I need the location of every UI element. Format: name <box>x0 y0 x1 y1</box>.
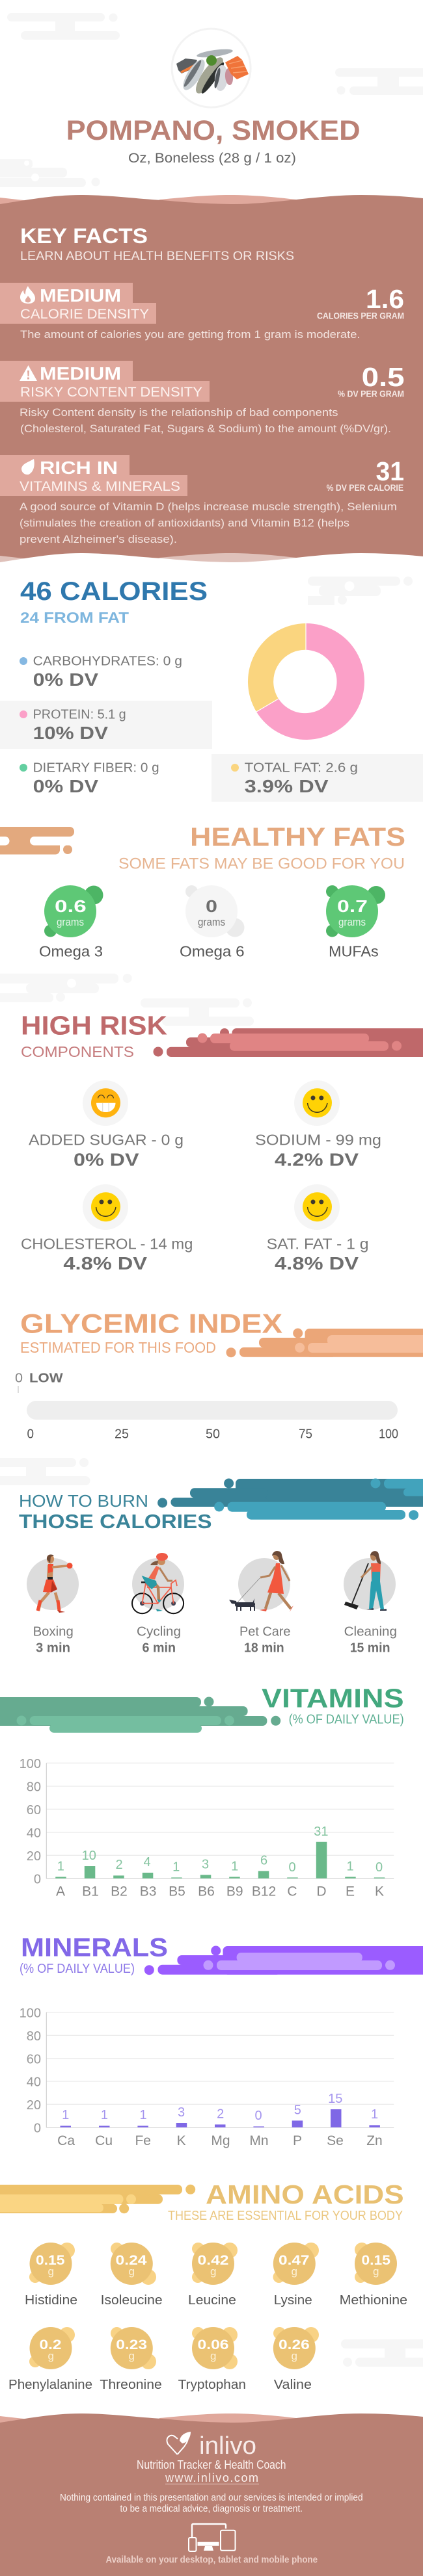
amino: lysine: g <box>292 2265 297 2278</box>
amino: valine: Valine <box>274 2378 312 2392</box>
panel: amino acids <box>0 2179 423 2392</box>
item: added sugar <box>29 1080 184 1169</box>
logo: heart and leaf <box>167 2432 191 2454</box>
heading line 2: THOSE CALORIES <box>19 1510 212 1533</box>
decorative cloud <box>0 1458 90 1485</box>
macro: dietary fiber: DIETARY FIBER: 0 g <box>33 761 159 775</box>
wave bottom edge pale <box>0 553 296 565</box>
fact: calorie density: CALORIE DENSITY <box>20 307 149 322</box>
bar chart: minerals: 0 <box>254 2109 262 2123</box>
disclaimer <box>60 2492 363 2514</box>
amino: methionine: Methionine <box>340 2293 407 2308</box>
bar chart: vitamins: E <box>346 1884 355 1899</box>
bubble: omega 3: Omega 3 <box>39 943 103 960</box>
item: sodium: SODIUM - 99 mg <box>255 1132 381 1149</box>
fact: risky content density: 0.5 <box>362 362 405 392</box>
icon: cyclist <box>132 1553 184 1613</box>
fact: calorie density: CALORIES PER GRAM <box>317 311 404 321</box>
amino: valine: g <box>292 2350 297 2362</box>
logo wordmark: inlivo <box>199 2432 256 2460</box>
fact: risky content density: MEDIUM <box>40 363 121 384</box>
amino: lysine: Lysine <box>274 2293 312 2308</box>
amino: threonine: g <box>129 2350 135 2362</box>
amino: threonine <box>100 2327 162 2392</box>
bar chart: vitamins: 0 <box>34 1872 41 1886</box>
bar chart: minerals: P <box>293 2133 302 2148</box>
bubble: omega 6 <box>180 885 245 960</box>
amino: leucine: 0.42 <box>198 2253 229 2268</box>
bar chart: vitamins: 40 <box>27 1827 41 1841</box>
panel: healthy fats <box>0 823 405 960</box>
heading: MINERALS <box>21 1933 168 1962</box>
activity: boxing <box>27 1554 79 1656</box>
amino: leucine: g <box>210 2265 216 2278</box>
macro: protein: PROTEIN: 5.1 g <box>33 708 126 722</box>
bar chart: minerals: 60 <box>27 2052 41 2066</box>
fact: calorie density: 1.6 <box>366 284 404 314</box>
activity: cleaning: 15 min <box>350 1641 390 1656</box>
heading: HEALTHY FATS <box>190 823 405 852</box>
bar chart: minerals: K <box>177 2133 186 2148</box>
bar chart: vitamins: D <box>316 1884 327 1899</box>
amino: threonine: 0.23 <box>116 2337 147 2352</box>
amino: tryptophan <box>178 2327 246 2392</box>
bar chart: minerals: Cu <box>95 2133 113 2148</box>
bar chart: vitamins: 100 <box>20 1757 41 1771</box>
panel: high risk components <box>0 974 423 1273</box>
bar chart: vitamins: 31 <box>314 1825 329 1839</box>
fact: calorie density: MEDIUM <box>40 285 121 306</box>
panel: vitamins <box>0 1684 404 1899</box>
bar chart: vitamins: 80 <box>27 1780 41 1795</box>
macro: carbohydrates: 0% DV <box>33 670 98 690</box>
amino: methionine: 0.15 <box>362 2253 390 2268</box>
bar chart: vitamins: C <box>287 1884 297 1899</box>
decorative cloud <box>308 577 413 605</box>
bar chart: minerals: Zn <box>366 2133 383 2148</box>
activity: cycling <box>132 1553 184 1656</box>
macro: dietary fiber <box>20 761 159 796</box>
activity: pet care <box>229 1551 293 1656</box>
fact: rich in vitamins and minerals <box>0 455 404 545</box>
fact: rich in vitamins and minerals: (stimulates the creation of antioxidants) and Vitamin B12 (helps <box>20 517 349 529</box>
fact: calorie density <box>0 283 404 341</box>
decorative red bars <box>154 1028 423 1057</box>
icon: woman walking dog <box>229 1551 293 1612</box>
footer background <box>0 2413 423 2576</box>
item: added sugar: 0% DV <box>74 1149 139 1169</box>
bar chart: vitamins: B6 <box>198 1884 215 1899</box>
amino: tryptophan: g <box>210 2350 216 2362</box>
fact: risky content density: % DV PER GRAM <box>338 389 404 399</box>
bar chart: vitamins: B3 <box>140 1884 156 1899</box>
bar chart: minerals: 1 <box>101 2108 108 2122</box>
amino: methionine: g <box>373 2265 379 2278</box>
activity: pet care: Pet Care <box>239 1625 290 1639</box>
bubble: MUFAs: grams <box>338 916 366 928</box>
icon: boxer <box>38 1554 73 1613</box>
macro: total fat <box>212 754 423 802</box>
item: saturated fat: SAT. FAT - 1 g <box>267 1236 369 1253</box>
subheading: (% OF DAILY VALUE) <box>20 1962 135 1976</box>
decorative orange bars <box>226 1329 423 1357</box>
gauge marker <box>18 1386 19 1393</box>
heading: GLYCEMIC INDEX <box>20 1308 282 1339</box>
bar chart: vitamins: 1 <box>172 1860 180 1874</box>
gauge scale: 0 <box>27 1427 34 1442</box>
subheading: THESE ARE ESSENTIAL FOR YOUR BODY <box>168 2209 403 2223</box>
heading: AMINO ACIDS <box>206 2179 404 2209</box>
panel: glycemic index <box>15 1308 423 1442</box>
panel background <box>0 195 423 566</box>
icon: woman sweeping <box>344 1551 387 1611</box>
icon: smiling face <box>91 1192 120 1221</box>
key facts subheading: LEARN ABOUT HEALTH BENEFITS OR RISKS <box>20 249 294 263</box>
icon: leaf <box>21 459 34 475</box>
item: cholesterol: 4.8% DV <box>63 1253 147 1273</box>
bar chart: vitamins: 1 <box>346 1859 354 1873</box>
heading: calories: 46 CALORIES <box>20 577 208 606</box>
bubble: omega 3: grams <box>57 916 84 928</box>
bar chart: vitamins: 2 <box>115 1858 123 1872</box>
bar chart: minerals: 100 <box>20 2006 41 2020</box>
bubble: omega 3: 0.6 <box>55 896 87 916</box>
amino: leucine: Leucine <box>188 2293 236 2308</box>
bubble: omega 6: Omega 6 <box>180 943 245 960</box>
fact: rich in vitamins and minerals: RICH IN <box>40 458 118 478</box>
amino: isoleucine: Isoleucine <box>101 2293 163 2308</box>
decorative cloud centre <box>141 998 254 1026</box>
item: sodium <box>255 1080 381 1169</box>
macro: protein: 10% DV <box>33 723 108 743</box>
fact: risky content density: Risky Content density is the relationship of bad components <box>20 406 338 419</box>
macro: total fat: TOTAL FAT: 2.6 g <box>245 761 358 775</box>
decorative yellow bars <box>0 2185 195 2213</box>
gauge scale <box>27 1427 398 1442</box>
macro: carbohydrates: CARBOHYDRATES: 0 g <box>33 654 182 668</box>
bar chart: vitamins: B9 <box>226 1884 243 1899</box>
panel: key facts <box>0 195 423 569</box>
macro: protein <box>0 701 212 749</box>
gauge scale: 25 <box>115 1427 129 1442</box>
heading: VITAMINS <box>262 1684 404 1713</box>
icon: grinning face <box>91 1088 120 1117</box>
amino: histidine: g <box>48 2265 54 2278</box>
bar chart: minerals: Ca <box>57 2133 75 2148</box>
bar chart: minerals: 15 <box>328 2092 342 2106</box>
bar chart: minerals: 0 <box>34 2122 41 2136</box>
bar chart: vitamins: B5 <box>169 1884 185 1899</box>
panel: header <box>0 13 423 187</box>
decorative cloud top left <box>7 13 120 40</box>
bar chart: vitamins: 3 <box>202 1857 209 1871</box>
bubble: omega 6: grams <box>198 916 225 928</box>
fact: risky content density: RISKY CONTENT DENSITY <box>20 385 202 400</box>
panel: minerals <box>20 1933 423 2148</box>
macro: total fat: 3.9% DV <box>245 776 329 796</box>
amino: isoleucine <box>101 2243 163 2308</box>
bar chart: vitamins: 4 <box>143 1855 151 1869</box>
icon: smiling face <box>303 1192 332 1221</box>
wave light <box>0 2413 296 2425</box>
disclaimer: Nothing contained in this presentation and our services is intended or implied <box>60 2492 363 2503</box>
bubble: MUFAs <box>326 885 385 960</box>
bubble: omega 6: 0 <box>206 896 217 916</box>
fact: rich in vitamins and minerals: VITAMINS & MINERALS <box>20 479 180 494</box>
bar chart: vitamins: 0 <box>288 1860 296 1875</box>
bar chart: vitamins: 10 <box>82 1849 96 1863</box>
decorative bar <box>0 827 82 854</box>
panel: calories and macronutrients <box>0 577 423 802</box>
decorative purple bars <box>144 1946 423 1975</box>
amino: histidine: 0.15 <box>36 2253 65 2268</box>
fact: rich in vitamins and minerals: A good source of Vitamin D (helps increase muscle strength), Selenium <box>20 501 397 513</box>
fact: rich in vitamins and minerals: prevent Alzheimer's disease). <box>20 533 177 545</box>
amino: phenylalanine: g <box>48 2350 54 2362</box>
bar chart: minerals: 1 <box>139 2108 147 2122</box>
subheading: from fat: 24 FROM FAT <box>20 609 129 626</box>
macro: dietary fiber: 0% DV <box>33 776 98 796</box>
decorative green bars <box>0 1697 280 1733</box>
activity: boxing: 3 min <box>36 1641 70 1656</box>
bar chart: vitamins: B12 <box>252 1884 276 1899</box>
title: POMPANO, SMOKED <box>66 115 361 146</box>
subheading: SOME FATS MAY BE GOOD FOR YOU <box>118 855 405 873</box>
bar chart: minerals: Se <box>327 2133 344 2148</box>
disclaimer: to be a medical advice, diagnosis or treatment. <box>120 2503 303 2514</box>
bubble: MUFAs: MUFAs <box>329 943 379 960</box>
bar chart: vitamins: 1 <box>231 1859 238 1873</box>
amino: lysine <box>273 2243 319 2308</box>
decorative cloud <box>341 2339 423 2367</box>
bar chart: vitamins: 6 <box>260 1853 267 1867</box>
activity: pet care: 18 min <box>244 1641 284 1656</box>
activity: boxing: Boxing <box>33 1625 74 1639</box>
bar chart: minerals: 1 <box>371 2107 378 2122</box>
fact: rich in vitamins and minerals: % DV PER CALORIE <box>327 483 403 493</box>
fact: rich in vitamins and minerals: 31 <box>376 456 404 486</box>
bar chart: minerals: 20 <box>27 2098 41 2113</box>
bar chart: minerals: 1 <box>62 2108 69 2122</box>
key facts heading: KEY FACTS <box>20 224 148 248</box>
amino: tryptophan: 0.06 <box>198 2337 229 2352</box>
amino: histidine <box>25 2243 77 2308</box>
bar chart: vitamins: 20 <box>27 1849 41 1864</box>
availability note: Available on your desktop, tablet and mobile phone <box>105 2555 318 2566</box>
amino: tryptophan: Tryptophan <box>178 2378 246 2392</box>
amino: threonine: Threonine <box>100 2378 162 2392</box>
gauge rating: LOW <box>29 1372 63 1386</box>
amino: phenylalanine: 0.2 <box>39 2337 61 2352</box>
amino: histidine: Histidine <box>25 2293 77 2308</box>
panel: footer <box>0 2413 423 2576</box>
amino: methionine <box>340 2243 407 2308</box>
bar chart: vitamins: K <box>375 1884 384 1899</box>
amino: valine <box>273 2327 319 2392</box>
bar chart: minerals: 3 <box>178 2105 185 2120</box>
amino: isoleucine: g <box>129 2265 135 2278</box>
gauge scale: 75 <box>299 1427 312 1442</box>
item: added sugar: ADDED SUGAR - 0 g <box>29 1132 184 1149</box>
heading: HIGH RISK <box>21 1011 167 1041</box>
decorative cloud lower left <box>0 159 100 187</box>
amino: lysine: 0.47 <box>279 2253 310 2268</box>
bar chart: minerals: 5 <box>294 2103 301 2117</box>
item: sodium: 4.2% DV <box>275 1149 359 1169</box>
gauge scale: 50 <box>206 1427 220 1442</box>
icon: devices <box>189 2524 236 2551</box>
tagline: Nutrition Tracker & Health Coach <box>137 2458 286 2471</box>
bar chart: vitamins: 0 <box>375 1860 383 1875</box>
wave bottom edge white <box>0 553 423 569</box>
amino: isoleucine: 0.24 <box>116 2253 147 2268</box>
subheading: (% OF DAILY VALUE) <box>289 1713 404 1727</box>
bar chart: minerals: 40 <box>27 2075 41 2090</box>
macro: carbohydrates <box>20 654 182 690</box>
wave top edge light <box>0 195 296 207</box>
donut chart <box>248 623 364 740</box>
bar chart: vitamins: 1 <box>57 1859 64 1873</box>
bar chart: minerals: Mn <box>249 2133 269 2148</box>
bar chart: minerals: 80 <box>27 2029 41 2044</box>
bar chart: vitamins: 60 <box>27 1803 41 1817</box>
item: saturated fat <box>267 1184 369 1273</box>
decorative teal bars <box>157 1478 423 1520</box>
item: cholesterol: CHOLESTEROL - 14 mg <box>21 1236 193 1253</box>
bar chart: vitamins <box>20 1757 394 1899</box>
gauge bar <box>27 1401 398 1420</box>
amino: phenylalanine <box>8 2327 92 2392</box>
amino: valine: 0.26 <box>279 2337 310 2352</box>
bar chart: minerals <box>20 2006 394 2148</box>
bubble: MUFAs: 0.7 <box>337 896 368 916</box>
amino: leucine <box>188 2243 238 2308</box>
decorative cloud left <box>0 974 132 1002</box>
icon: flame <box>20 286 35 304</box>
activity: cleaning <box>344 1551 397 1656</box>
activity: cycling: Cycling <box>137 1625 181 1639</box>
bar chart: minerals: Mg <box>211 2133 230 2148</box>
icon: warning triangle <box>20 365 37 381</box>
subheading: ESTIMATED FOR THIS FOOD <box>20 1339 216 1356</box>
gauge value: 0 <box>15 1372 23 1386</box>
serving subtitle: Oz, Boneless (28 g / 1 oz) <box>128 151 296 166</box>
icon: smiling face <box>303 1088 332 1117</box>
bar chart: minerals: 2 <box>217 2107 224 2121</box>
activity: cleaning: Cleaning <box>344 1625 397 1639</box>
fact: risky content density <box>0 361 405 435</box>
fact: risky content density: (Cholesterol, Saturated Fat, Sugars & Sodium) to the amount (%DV/gr). <box>20 423 391 435</box>
activity: cycling: 6 min <box>142 1641 176 1656</box>
website link: www.inlivo.com <box>165 2471 258 2484</box>
subheading: COMPONENTS <box>21 1043 134 1060</box>
bar chart: vitamins: B1 <box>82 1884 99 1899</box>
heading line 1: HOW TO BURN <box>19 1491 148 1511</box>
decorative cloud right <box>335 68 423 95</box>
bar chart: vitamins: B2 <box>111 1884 128 1899</box>
item: cholesterol <box>21 1184 193 1273</box>
bar chart: vitamins: A <box>56 1884 65 1899</box>
gauge scale: 100 <box>379 1427 398 1442</box>
item: saturated fat: 4.8% DV <box>275 1253 359 1273</box>
amino: phenylalanine: Phenylalanine <box>8 2378 92 2392</box>
panel: how to burn those calories <box>0 1458 423 1656</box>
bubble: omega 3 <box>39 885 103 960</box>
food image: plate with fish <box>172 29 251 107</box>
bar chart: minerals: Fe <box>135 2133 151 2148</box>
fact: calorie density: The amount of calories you are getting from 1 gram is moderate. <box>20 328 361 341</box>
